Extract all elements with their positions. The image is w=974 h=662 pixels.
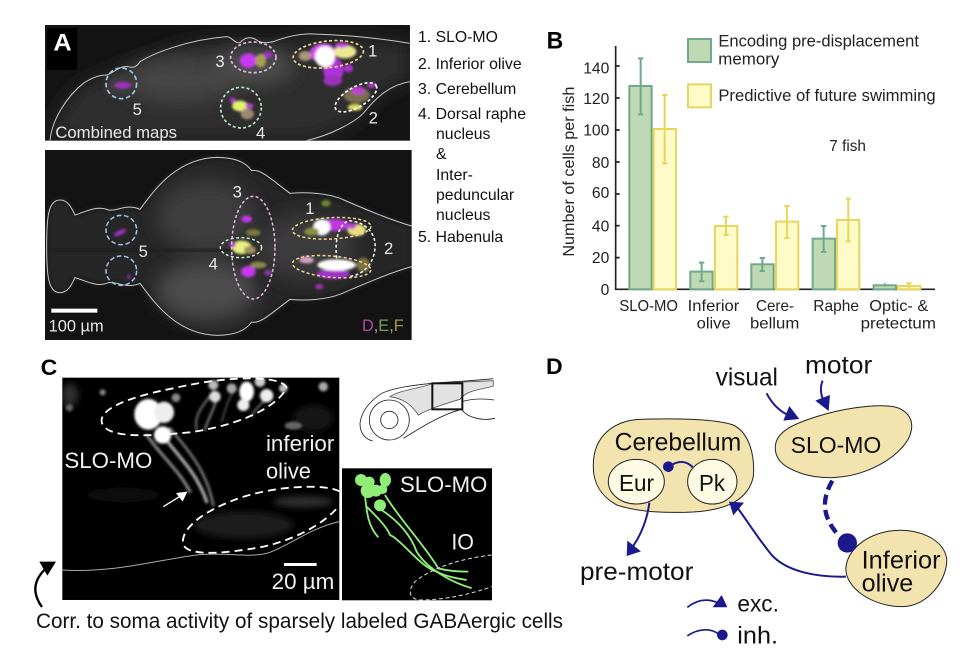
region list: peduncular (436, 187, 514, 204)
side view brain map: 5 (133, 100, 142, 119)
panel letter D: D (546, 354, 563, 379)
region list: 2. Inferior olive (418, 56, 522, 73)
panel letter C: C (41, 355, 57, 380)
fish sketch (360, 379, 495, 441)
dashed region outlines (106, 37, 381, 128)
cerebellum: Cerebellum (615, 428, 741, 456)
region list: 4. Dorsal raphe (418, 106, 526, 123)
y tick labels: 40 (592, 219, 610, 236)
y tick labels: 100 (583, 123, 610, 140)
top view brain map: 5 (139, 242, 148, 261)
region list: 1. SLO-MO (418, 29, 498, 46)
legend: inhibitory (687, 623, 778, 650)
body outline (62, 522, 339, 571)
category labels: SLO-MO (619, 298, 678, 315)
region list: nucleus (436, 126, 491, 143)
activity clusters (114, 42, 376, 119)
side view brain map: 1 (368, 41, 377, 60)
dashed regions (102, 378, 340, 553)
top view brain map: 1 (305, 199, 315, 218)
y axis label: Number of cells per fish (561, 87, 578, 257)
category labels: olive (697, 315, 731, 332)
legend: excitatory: exc. (737, 590, 779, 616)
Pk: Pk (699, 470, 726, 496)
panel C: micrograph (35, 355, 340, 607)
motor arrow (815, 381, 830, 411)
legend: excitatory (687, 590, 779, 616)
region list: Inter- (436, 167, 473, 184)
n annotation: 7 fish (829, 138, 866, 155)
visual arrow (767, 393, 799, 421)
side view brain map: 4 (256, 124, 265, 143)
region list: nucleus (436, 207, 491, 224)
legend: Predictive of future swimming (718, 86, 936, 105)
y tick labels: 80 (592, 155, 610, 172)
top view brain map: 2 (384, 239, 393, 258)
legend: memory (718, 49, 780, 68)
region list: 3. Cerebellum (418, 81, 516, 98)
scale bar: 100 µm (49, 318, 104, 336)
panel B: bar chart (547, 28, 936, 332)
category labels: bellum (750, 315, 799, 332)
region list (418, 29, 526, 246)
olive to cerebellum arrow (729, 502, 846, 577)
top view brain map: 4 (209, 254, 218, 273)
input and output labels (580, 351, 873, 586)
y tick labels: 0 (601, 282, 610, 299)
Eur: Eur (619, 470, 654, 496)
input and output labels: visual (716, 364, 778, 392)
labeled neurons (66, 376, 328, 505)
y tick labels: 120 (583, 91, 610, 108)
Pk (688, 459, 737, 504)
axes (616, 46, 935, 289)
panel letter B: B (547, 28, 563, 55)
panel D: circuit diagram (546, 351, 947, 650)
cerebellum (593, 419, 754, 512)
side view brain map: 3 (215, 52, 225, 71)
arrow (163, 492, 187, 507)
map key: D,E,F (362, 317, 404, 335)
y tick labels: 20 (592, 250, 610, 267)
panel letter A (47, 28, 77, 70)
y tick labels: 60 (592, 185, 610, 202)
side view brain map: 2 (369, 109, 378, 128)
inhibitory Pk to Eur (663, 461, 693, 472)
category labels (619, 298, 936, 332)
panel A: brain maps (45, 25, 412, 340)
SLO-MO (775, 406, 912, 478)
legend (688, 32, 936, 107)
category labels: Cere- (756, 298, 794, 315)
caption: Corr. to soma activity of sparsely labeled GABAergic cells (36, 610, 563, 633)
input and output labels: motor (805, 351, 873, 379)
outline (50, 34, 410, 141)
labels: inferior (266, 431, 334, 456)
labels: SLO-MO (64, 448, 152, 473)
labels (64, 431, 334, 483)
inset: traced neurons: SLO-MO (400, 472, 487, 497)
background haze (62, 383, 333, 538)
Eur to pre-motor arrow (627, 503, 649, 556)
region list: 5. Habenula (418, 229, 503, 246)
yellow bars (654, 95, 920, 289)
inferior olive (846, 530, 947, 607)
dashed inhibitory arrow (825, 481, 857, 553)
category labels: Raphe (813, 298, 859, 315)
scale bar: 20 µm (272, 569, 334, 594)
y tick labels: 140 (583, 60, 610, 77)
curved arrow (35, 562, 56, 607)
category labels: Inferior (688, 298, 739, 315)
activity clusters (113, 200, 370, 289)
dashed region outlines (106, 196, 375, 299)
category labels: Optic- & (869, 298, 929, 315)
SLO-MO: SLO-MO (791, 432, 881, 458)
category labels: pretectum (861, 315, 936, 332)
labels: olive (266, 458, 311, 483)
side view brain map (45, 25, 410, 143)
legend: inhibitory: inh. (737, 623, 778, 650)
green bars (629, 58, 896, 289)
inferior olive: olive (862, 570, 913, 598)
inset: traced neurons (342, 468, 492, 600)
panel letter A: A (53, 29, 72, 56)
inferior olive: Inferior (862, 546, 941, 574)
inset: traced neurons: IO (451, 529, 474, 554)
Eur (608, 459, 664, 504)
top view brain map: 3 (233, 183, 242, 202)
region list: & (436, 146, 447, 163)
y tick labels (583, 60, 610, 299)
input and output labels: pre-motor (580, 558, 694, 586)
outline (47, 157, 412, 335)
top view brain map (45, 150, 412, 340)
side view brain map: Combined maps (55, 123, 177, 142)
scale bar (49, 309, 104, 336)
legend: Encoding pre-displacement (718, 32, 919, 51)
